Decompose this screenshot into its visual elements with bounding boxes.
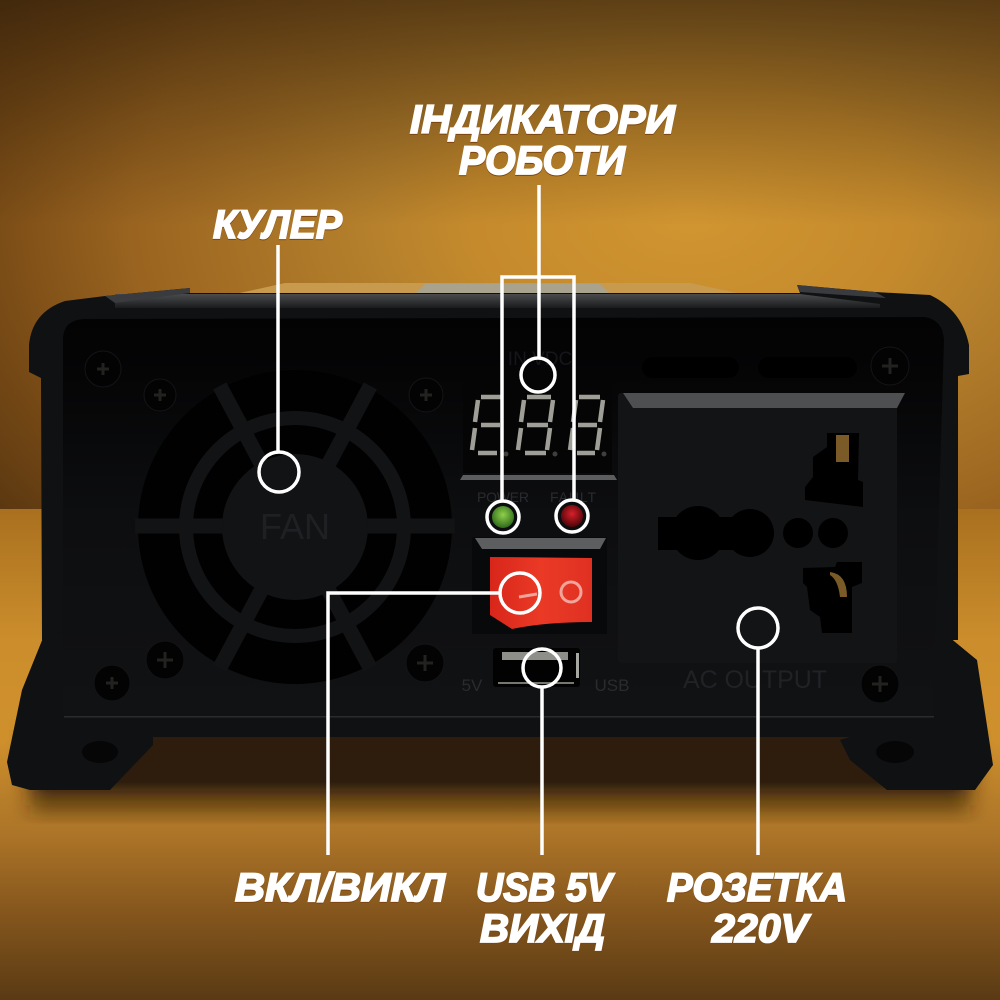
screw crosses (97, 358, 898, 692)
inverter device (7, 283, 993, 790)
label: on/off: ВКЛ/ВИКЛ (235, 866, 447, 910)
label: usb: ВИХІД (480, 907, 605, 951)
panel labels: USB (595, 676, 629, 695)
screws (85, 347, 909, 703)
led green (492, 506, 514, 528)
usb port (493, 648, 580, 687)
panel labels: AC OUTPUT (683, 666, 827, 694)
digital display (460, 377, 617, 480)
fan label: FAN (260, 506, 330, 547)
background: lower table (0, 509, 1000, 1000)
fan grille (138, 382, 452, 684)
label: indicators: РОБОТИ (459, 139, 626, 183)
panel labels: POWER (477, 489, 529, 505)
panel labels: IN VDC (508, 349, 572, 370)
label: outlet (667, 866, 847, 951)
callout: outlet (667, 608, 847, 951)
ac outlet (618, 393, 905, 663)
panel labels: FAULT (550, 489, 596, 505)
label: outlet: 220V (711, 907, 811, 951)
label: usb: USB 5V (476, 866, 615, 910)
corner tabs (105, 285, 886, 303)
case outline and feet (7, 285, 993, 790)
led red (561, 505, 583, 527)
panel labels: 5V (462, 676, 483, 695)
background: upper wall (0, 0, 1000, 510)
decimal points (504, 452, 606, 456)
outlet holes (658, 433, 863, 633)
callout: on/off switch (235, 573, 540, 910)
rocker switch (472, 537, 607, 634)
foot holes (82, 741, 914, 763)
seven-segment digits (472, 397, 603, 453)
label: usb (476, 866, 615, 951)
ventilation slots (642, 357, 857, 378)
label: fan: КУЛЕР (213, 203, 342, 247)
label: indicators: ІНДИКАТОРИ (410, 98, 676, 142)
top of the case behind the front (235, 283, 742, 294)
callout: fan (213, 203, 342, 492)
callout: indicators (410, 98, 676, 533)
label: indicators (410, 98, 676, 183)
device shadow (30, 730, 970, 825)
panel labels (462, 349, 827, 695)
bottom rim detail (64, 716, 934, 718)
callout: usb (476, 649, 615, 951)
top strip (115, 294, 880, 308)
label: outlet: РОЗЕТКА (667, 866, 847, 910)
front panel (63, 317, 944, 717)
brass contacts (830, 435, 849, 597)
